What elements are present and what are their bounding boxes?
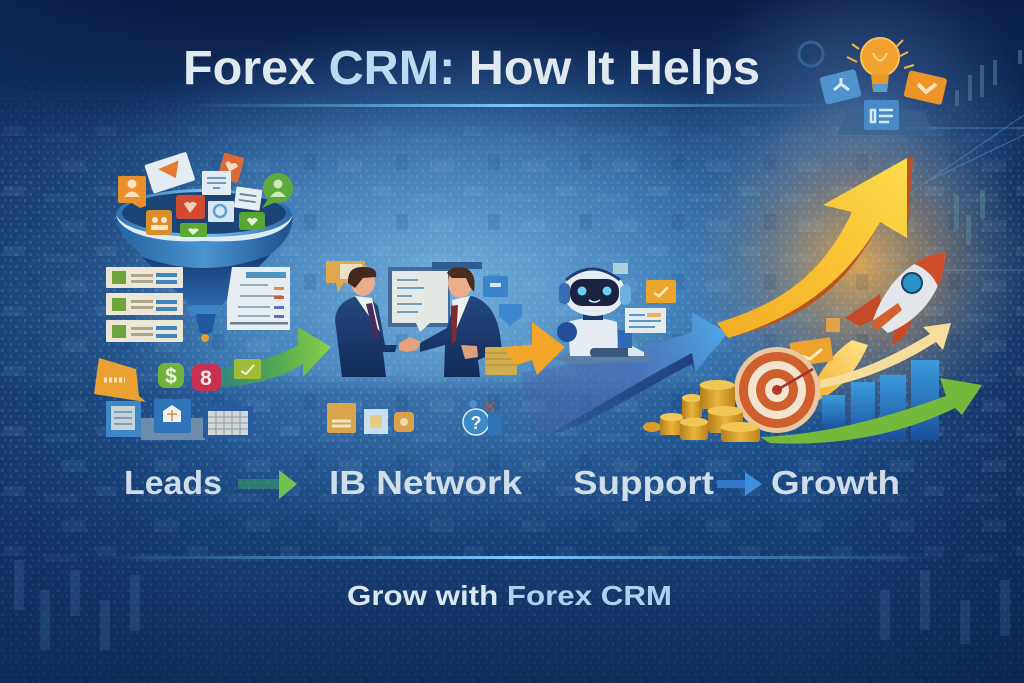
icon: question clock (463, 400, 502, 435)
label: Support: Support (573, 464, 714, 501)
bar chart (822, 360, 939, 440)
icon: document (106, 401, 141, 437)
report card (227, 267, 290, 330)
icon: orange card (327, 403, 356, 433)
icon: user bubble green (262, 173, 293, 208)
label: Growth: Growth (771, 464, 900, 501)
icon: platform tray (141, 418, 205, 440)
rocket (808, 252, 945, 405)
icon: people card (146, 210, 172, 235)
lead list cards (106, 267, 183, 342)
robot head (559, 268, 631, 316)
green curved arrow (760, 378, 982, 444)
person: left man (335, 267, 397, 377)
coin stack (485, 347, 517, 375)
green arrow (208, 327, 331, 387)
icon: dollar badge: $ (165, 365, 177, 388)
arrow: leads to network (238, 470, 297, 499)
lead channel icons (94, 358, 261, 440)
icon: heart card red (176, 195, 205, 219)
speech bubble (326, 261, 365, 292)
presentation board (388, 262, 482, 332)
icon: home tile (154, 399, 191, 433)
icon: question clock: ? (470, 413, 482, 433)
funnel (116, 189, 293, 342)
small tag (613, 263, 628, 274)
label: IB Network: IB Network (329, 464, 523, 501)
orange arrow (502, 322, 565, 375)
title: Forex CRM: How It Helps (183, 42, 760, 95)
yellow growth arrow (717, 158, 913, 338)
target (734, 347, 820, 433)
robot body (553, 310, 652, 364)
icon: list card (234, 186, 262, 211)
label: Leads: Leads (124, 464, 222, 501)
icon: heart card orange (217, 153, 244, 183)
icon: rupee badge (192, 364, 221, 391)
icon: folder (94, 358, 146, 402)
icon: mail card (144, 152, 195, 194)
gold coins (643, 380, 760, 442)
tagline: Grow with Forex CRM (347, 580, 672, 611)
icon: heart card green (239, 212, 265, 230)
person: right man (420, 267, 502, 377)
orange check box (790, 318, 840, 367)
icon: letter card (208, 201, 234, 222)
white list card (625, 308, 666, 333)
orange check card (646, 280, 676, 303)
support robot (553, 263, 676, 364)
icon: document (364, 409, 388, 434)
icon: rupee badge: 8 (200, 367, 212, 390)
icon: orange tile (394, 412, 414, 432)
icon: calendar (203, 400, 253, 438)
divider line (90, 556, 950, 559)
IB network scene (326, 261, 522, 377)
icon: dollar badge (158, 363, 184, 388)
title underline (190, 104, 830, 107)
network icons (327, 400, 502, 435)
icon: text card (202, 171, 231, 195)
blue chat tile (483, 276, 508, 297)
blue arrow (520, 312, 728, 432)
icon: lightbulb idea cluster (799, 38, 947, 135)
cream arrow (820, 323, 951, 388)
icon: check card (234, 359, 261, 379)
funnel group (116, 152, 293, 342)
icon: shield (499, 304, 522, 326)
handshake (399, 337, 421, 352)
icon: heart card green small (180, 223, 207, 237)
arrow: support to growth (717, 472, 762, 496)
icon: user bubble orange (118, 176, 146, 208)
